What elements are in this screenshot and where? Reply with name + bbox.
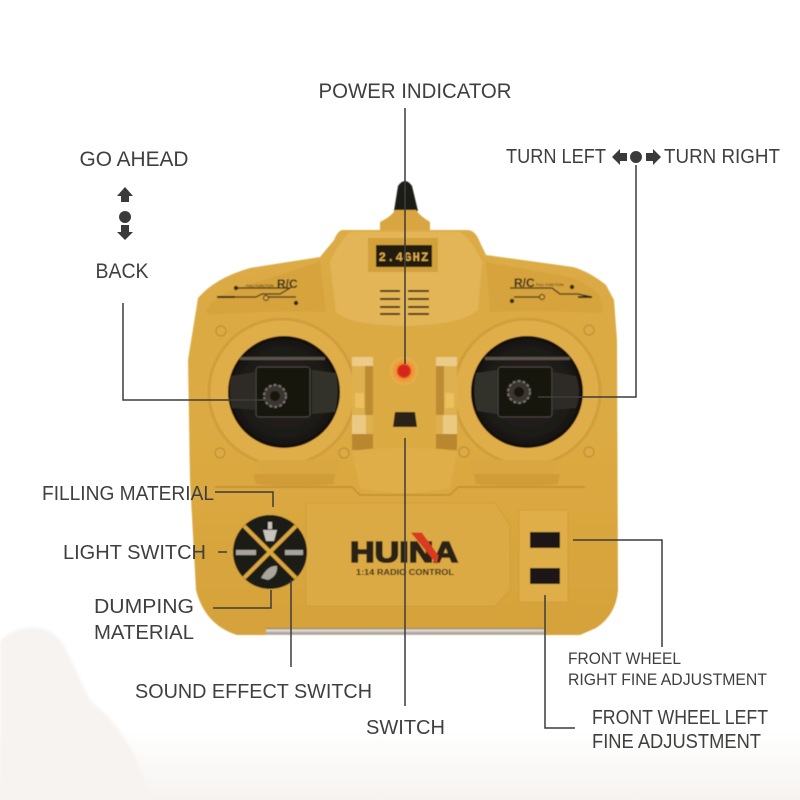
label: turn left: TURN LEFT	[506, 146, 606, 168]
bottom slot	[266, 628, 544, 635]
left R/C panel: FULL FUNCTION	[246, 284, 274, 288]
label: dumping material: MATERIAL	[94, 621, 194, 644]
right R/C panel: R/C	[514, 276, 535, 290]
label: front wheel right fine adjustment: RIGHT FINE ADJUSTMENT	[568, 671, 767, 689]
label: switch: SWITCH	[366, 716, 445, 739]
left stick housing	[209, 319, 355, 465]
label: front wheel left fine adjustment: FRONT WHEEL LEFT	[592, 707, 768, 729]
display	[368, 238, 438, 272]
left R/C panel: R/C	[277, 277, 298, 291]
controller	[188, 181, 618, 635]
logo plate	[306, 503, 510, 606]
HUINA logo: 1:14 RADIO CONTROL	[356, 567, 454, 577]
leader lines	[123, 108, 662, 728]
icon: filling	[263, 522, 277, 541]
cable collar	[380, 210, 430, 231]
left R/C panel	[206, 262, 326, 315]
centre tower shading	[330, 232, 482, 326]
label: filling material: FILLING MATERIAL	[42, 483, 214, 505]
lower stands	[253, 460, 560, 486]
label: dumping material: DUMPING	[94, 595, 194, 618]
label: back: BACK	[96, 260, 148, 283]
trim buttons	[519, 510, 568, 602]
power switch	[393, 412, 417, 427]
icon: sound	[285, 550, 303, 555]
right trim slider	[436, 357, 457, 450]
label: sound effect switch: SOUND EFFECT SWITCH	[135, 680, 372, 703]
controller body	[188, 230, 618, 635]
left trim slider	[352, 357, 373, 450]
icon: up, dot, down arrows	[117, 187, 133, 240]
centre tab	[352, 448, 457, 493]
power LED	[390, 357, 418, 385]
label: front wheel left fine adjustment: FINE ADJUSTMENT	[592, 731, 761, 753]
cable	[394, 181, 418, 211]
label: light switch: LIGHT SWITCH	[63, 541, 206, 564]
label: go ahead: GO AHEAD	[80, 148, 188, 171]
display: 2.4GHZ	[378, 251, 430, 265]
screws	[215, 325, 594, 458]
right R/C panel	[486, 262, 603, 313]
HUINA logo: HUINA	[350, 537, 458, 569]
speaker grille	[380, 291, 429, 314]
label: front wheel right fine adjustment: FRONT WHEEL	[568, 650, 681, 668]
label: turn right: TURN RIGHT	[664, 146, 780, 168]
lower divider	[215, 487, 585, 495]
icon: dumping	[261, 566, 277, 580]
right R/C panel: FULL FUNCTION	[536, 283, 564, 287]
function buttons	[233, 515, 307, 589]
icon: light	[236, 550, 256, 555]
icon: left, dot, right arrows	[612, 149, 661, 165]
label: power indicator: POWER INDICATOR	[318, 80, 512, 103]
right stick housing	[454, 319, 600, 465]
HUINA logo	[350, 534, 458, 577]
